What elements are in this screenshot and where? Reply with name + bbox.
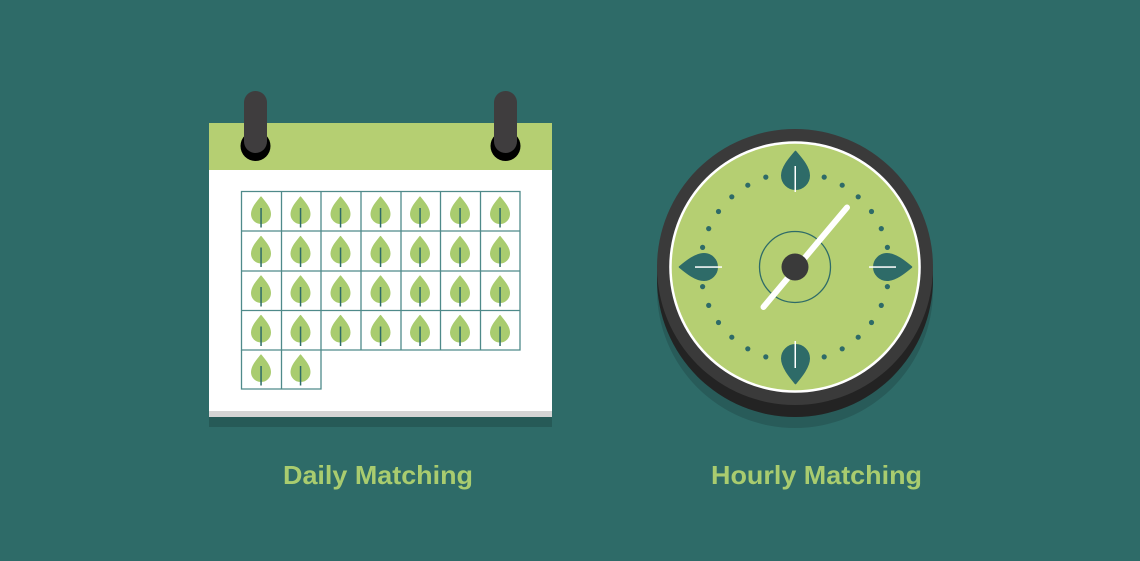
minute dots <box>700 174 890 360</box>
inner dial ring <box>760 232 830 302</box>
calendar <box>209 91 552 427</box>
clock face <box>672 144 918 390</box>
clock hand <box>764 208 847 307</box>
left binder ring <box>240 91 270 161</box>
calendar header <box>209 123 552 170</box>
clock <box>657 129 933 428</box>
right binder ring <box>490 91 520 161</box>
clock hub <box>782 254 808 280</box>
calendar leaves <box>252 197 509 386</box>
label: daily matching: Daily Matching <box>283 460 473 490</box>
bottom leaf marker <box>782 341 809 384</box>
label: hourly matching: Hourly Matching <box>711 460 922 490</box>
calendar grid <box>242 192 520 389</box>
top leaf marker <box>782 152 809 192</box>
left leaf marker <box>680 254 722 280</box>
right leaf marker <box>869 254 912 280</box>
